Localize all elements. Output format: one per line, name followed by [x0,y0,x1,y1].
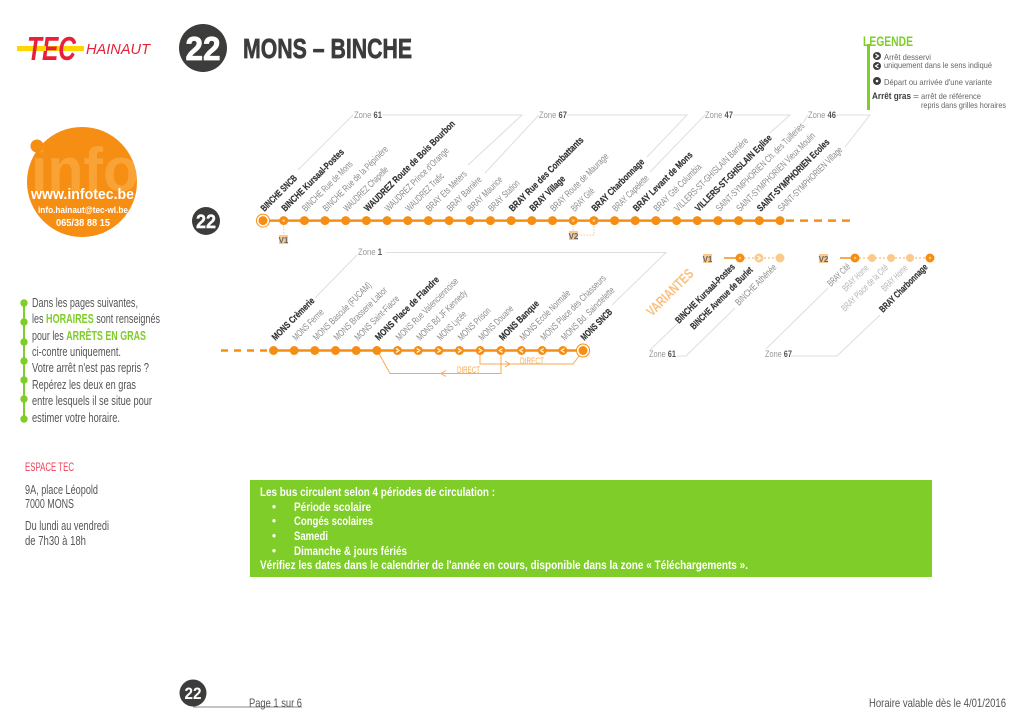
zone lines bottom [315,247,666,305]
side note with green timeline: Repérez les deux en gras [32,378,136,392]
side note with green timeline: ci-contre uniquement. [32,345,121,359]
zone lines top: Zone 46 [808,110,836,121]
zone lines top [298,110,870,173]
legend: repris dans grilles horaires [921,100,1006,110]
stop labels top: WAUDREZ Prince d'Orange [383,146,452,214]
green notice panel: Congés scolaires [294,516,373,528]
direct connectors [377,350,583,376]
stop labels top: BRAY Village [528,174,568,214]
stop labels bottom: MONS Rue Valenciennoise [394,276,461,343]
side note with green timeline: les HORAIRES sont renseignés [32,312,160,326]
stop labels top: BINCHE SNCB [259,173,300,214]
green notice panel: Les bus circulent selon 4 périodes de circulation : [260,487,495,499]
stop labels bottom: MONS Bascule (FUCAM) [311,280,374,343]
legend: = [913,91,919,101]
footer page number: Page 1 sur 6 [249,696,302,710]
variant V1: V1 [703,255,713,264]
route line top [256,214,850,235]
side note with green timeline: Votre arrêt n'est pas repris ? [32,361,149,375]
variants heading: VARIANTES [643,265,697,319]
stop labels bottom: MONS Place de Flandre [373,275,442,343]
variant V1 [649,254,784,360]
variant markers on top line: V2 [569,232,579,241]
stop labels top: BRAY Rue des Combattants [507,135,586,214]
legend: Départ ou arrivée d'une variante [884,77,992,87]
stop labels top: VILLERS-ST-GHISLAIN Barrière [672,136,751,214]
stop labels top: WAUDREZ Chapelle [342,165,391,214]
stop labels top: BRAY Maurice [466,175,505,214]
green notice panel: Samedi [294,531,328,543]
stop labels top [259,119,845,214]
stop labels bottom: MONS Crèmerie [270,296,317,343]
variant V1: BINCHE Kursaal-Postes [673,262,738,326]
stop labels bottom: MONS SNCB [579,307,615,343]
green notice panel: • [272,516,276,528]
logo: TEC Hainaut: TEC [27,30,77,67]
footer page number: 22 [184,684,202,703]
stop labels bottom: MONS Place des Chasseurs [539,273,609,343]
footer page number [180,680,302,710]
zone lines top: Zone 61 [354,110,383,121]
line number badge: 22 [186,30,220,67]
legend: Arrêt gras [872,91,911,102]
stop labels bottom: MONS Brasserie Labor [332,285,390,343]
variant V2: V2 [819,255,829,264]
side note with green timeline: entre lesquels il se situe pour [32,394,152,408]
info badge: info.hainaut@tec-wl.be [38,205,128,216]
line number badge [179,24,227,72]
green notice panel [250,480,932,577]
direct connectors: DIRECT [457,365,480,376]
side note with green timeline: pour les ARRÊTS EN GRAS [32,328,146,343]
contact: Espace TEC: Du lundi au vendredi [25,519,109,533]
contact: Espace TEC [25,460,109,548]
green notice panel: Vérifiez les dates dans le calendrier de l'année en cours, disponible dans la zone « Téléchargements ». [260,560,748,572]
variant markers on top line [279,231,579,245]
stop labels bottom: MONS Saint-Fiacre [353,294,402,343]
title: MONS – BINCHE [243,33,412,64]
variant V2: BRAY Place de la Cité [839,263,891,314]
stop labels bottom: MONS Ferme [291,307,327,343]
stop labels bottom: MONS Lycée [435,309,469,343]
small line badge [192,207,220,235]
stop labels top: SAINT-SYMPHORIEN Ch. des Tuilleries [714,121,807,214]
side note with green timeline: Dans les pages suivantes, [32,296,138,310]
stop labels top: WAUDREZ Trafic [404,171,447,214]
legend: Arrêt desservi [884,52,931,62]
variant V2 [765,254,934,360]
contact: Espace TEC: 7000 MONS [25,497,74,511]
legend [863,33,1006,110]
green notice panel: • [272,531,276,543]
stop labels top: BRAY Levant de Mons [631,150,695,214]
variant V1: BINCHE Athénée [733,262,779,308]
zone lines bottom: Zone 1 [358,247,383,258]
variant V1: Zone 61 [649,349,677,360]
info badge: info [31,136,139,205]
zone lines top: Zone 67 [539,110,567,121]
stop labels top: BRAY Gté Columbia [652,161,704,214]
stop labels top: BRAY Gité [569,186,597,214]
green notice panel: Dimanche & jours fériés [294,546,407,558]
stop labels top: WAUDREZ Route de Bois Bourbon [362,119,458,214]
legend: LEGENDE [863,33,913,49]
info badge: 065/38 88 15 [56,218,110,229]
contact: Espace TEC: de 7h30 à 18h [25,534,86,548]
variant V2: BRAY Home [840,263,871,294]
stop labels top: VILLERS-ST-GHISLAIN Eglise [693,133,774,214]
stop labels top: BRAY Ets Meters [424,169,470,214]
stop labels bottom: MONS Prison [456,306,493,343]
side note with green timeline [20,296,160,425]
legend: uniquement dans le sens indiqué [884,60,992,70]
stop labels bottom [270,273,617,343]
green notice panel: • [272,546,276,558]
direct connectors: DIRECT [520,356,544,367]
variant V2: BRAY Cité [825,262,853,289]
logo: TEC Hainaut [17,30,152,67]
variant V2: BRAY Charbonnage [877,262,930,315]
stop labels top: BINCHE Rue de la Pépinière [321,144,391,214]
info badge: www.infotec.be [30,186,134,203]
info badge [27,127,139,237]
zone lines top: Zone 47 [705,110,733,121]
stop labels top: SAINT-SYMPHORIEN Ecoles [755,137,832,214]
variant markers on top line: V1 [279,236,289,245]
green notice panel: • [272,502,276,514]
stop labels top: SAINT-SYMPHORIEN Village [776,145,845,214]
stop labels top: BRAY Capelette [610,173,651,214]
stop labels top: BRAY Charbonnage [590,157,647,214]
stop labels top: BRAY Route de Maurage [548,151,611,214]
stop labels top: SAINT-SYMPHORIEN Vieux Moulin [734,131,818,214]
stop labels bottom: MONS Bd JF Kennedy [415,288,470,343]
stop labels bottom: MONS Douane [477,304,516,343]
stop labels top: BINCHE Kursaal-Postes [280,147,347,214]
contact: Espace TEC: ESPACE TEC [25,460,74,474]
legend: arrêt de référence [921,91,981,101]
small line badge: 22 [196,212,216,233]
stop labels top: BRAY Station [486,178,522,214]
variant V2: BRAY Home [879,263,910,294]
green notice panel: Période scolaire [294,502,371,514]
stop labels bottom: MONS Ecole Normale [518,288,573,343]
stop labels bottom: MONS Bd. Sainctelette [559,285,617,343]
route line bottom [221,344,590,357]
stop labels top: BINCHE Rue de Mons [300,159,356,214]
variant V2: Zone 67 [765,349,792,360]
side note with green timeline: estimer votre horaire. [32,411,120,425]
contact: Espace TEC: 9A, place Léopold [25,483,98,497]
stop labels bottom: MONS Banque [497,299,542,343]
stop labels top: BRAY Barrière [445,175,485,214]
logo: TEC Hainaut: HAINAUT [86,41,152,58]
variant V1: BINCHE Avenue de Burlet [688,265,756,332]
